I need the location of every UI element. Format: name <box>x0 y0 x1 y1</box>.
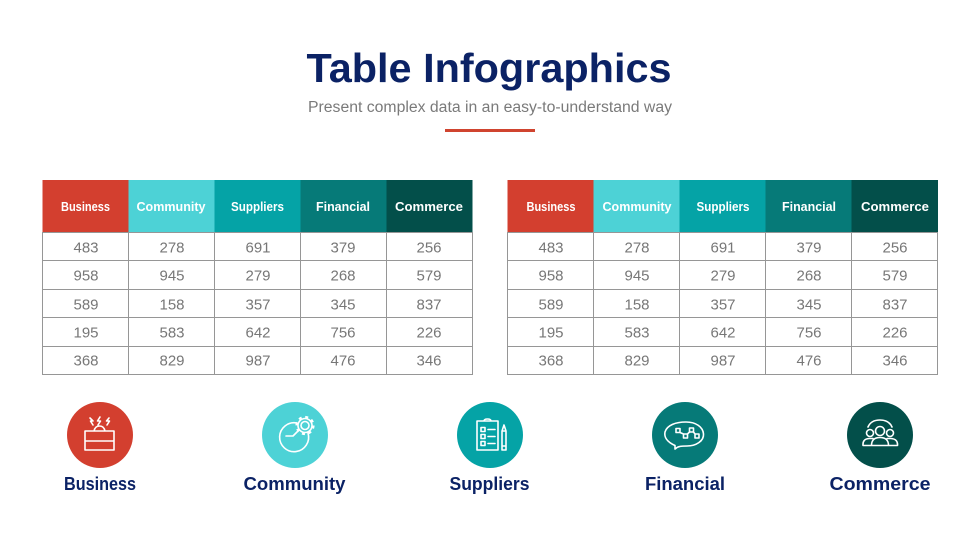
data values: 837 <box>416 297 442 314</box>
data values: 357 <box>710 297 736 314</box>
data values: 642 <box>710 325 736 342</box>
data values: 346 <box>882 353 908 370</box>
table: right <box>507 180 938 375</box>
icon: financial speech bubble <box>652 402 718 468</box>
label: Community: Community <box>244 473 346 494</box>
data values: 829 <box>624 353 650 370</box>
data values: 357 <box>245 297 271 314</box>
header row: Commerce <box>861 200 929 214</box>
header row: Financial <box>782 200 836 214</box>
icon: community gear <box>262 402 328 468</box>
data values: 945 <box>624 268 650 285</box>
icon: suppliers clipboard <box>457 402 523 468</box>
data values: 279 <box>710 268 736 285</box>
grid lines <box>507 232 938 375</box>
data values: 837 <box>882 297 908 314</box>
data values: 226 <box>882 325 908 342</box>
data values: 345 <box>796 297 822 314</box>
data values: 345 <box>330 297 356 314</box>
data values: 158 <box>624 297 650 314</box>
data values: 195 <box>538 325 564 342</box>
data values: 476 <box>330 353 356 370</box>
label: Suppliers: Suppliers <box>450 473 530 494</box>
data values: 583 <box>159 325 185 342</box>
header row <box>508 180 938 232</box>
data values: 583 <box>624 325 650 342</box>
data values <box>538 240 908 370</box>
data values: 589 <box>73 297 99 314</box>
data values: 691 <box>245 240 271 257</box>
data values: 379 <box>796 240 822 257</box>
data values: 579 <box>882 268 908 285</box>
data values: 958 <box>538 268 564 285</box>
data values: 642 <box>245 325 271 342</box>
data values: 958 <box>73 268 99 285</box>
data values: 268 <box>796 268 822 285</box>
label: Business: Business <box>64 473 136 494</box>
data values: 279 <box>245 268 271 285</box>
data values: 278 <box>624 240 650 257</box>
data values: 476 <box>796 353 822 370</box>
data values <box>73 240 442 370</box>
title accent line <box>445 129 535 132</box>
table: left <box>42 180 473 375</box>
header row: Commerce <box>395 200 463 214</box>
data values: 346 <box>416 353 442 370</box>
data values: 691 <box>710 240 736 257</box>
header row: Community <box>136 200 206 214</box>
data values: 379 <box>330 240 356 257</box>
data values: 579 <box>416 268 442 285</box>
title: Table Infographics <box>306 45 672 91</box>
label: Financial: Financial <box>645 473 725 494</box>
data values: 483 <box>73 240 99 257</box>
data values: 756 <box>330 325 356 342</box>
grid lines <box>42 232 473 375</box>
header row: Financial <box>316 200 370 214</box>
data values: 226 <box>416 325 442 342</box>
data values: 256 <box>416 240 442 257</box>
header row: Suppliers <box>231 200 284 214</box>
data values: 756 <box>796 325 822 342</box>
header row: Suppliers <box>696 200 750 214</box>
header row <box>42 180 472 232</box>
data values: 368 <box>538 353 564 370</box>
data values: 945 <box>159 268 185 285</box>
data values: 268 <box>330 268 356 285</box>
data values: 278 <box>159 240 185 257</box>
icon: business briefcase <box>67 402 133 468</box>
header row: Business <box>61 200 110 214</box>
header row: Community <box>602 200 672 214</box>
header row: Business <box>526 200 576 214</box>
label: Commerce: Commerce <box>830 473 930 494</box>
data values: 829 <box>159 353 185 370</box>
data values: 589 <box>538 297 564 314</box>
data values: 987 <box>710 353 736 370</box>
data values: 987 <box>245 353 271 370</box>
data values: 483 <box>538 240 564 257</box>
data values: 158 <box>159 297 185 314</box>
icon: commerce people <box>847 402 913 468</box>
data values: 368 <box>73 353 99 370</box>
data values: 256 <box>882 240 908 257</box>
subtitle: Present complex data in an easy-to-understand way <box>308 99 672 116</box>
data values: 195 <box>73 325 99 342</box>
